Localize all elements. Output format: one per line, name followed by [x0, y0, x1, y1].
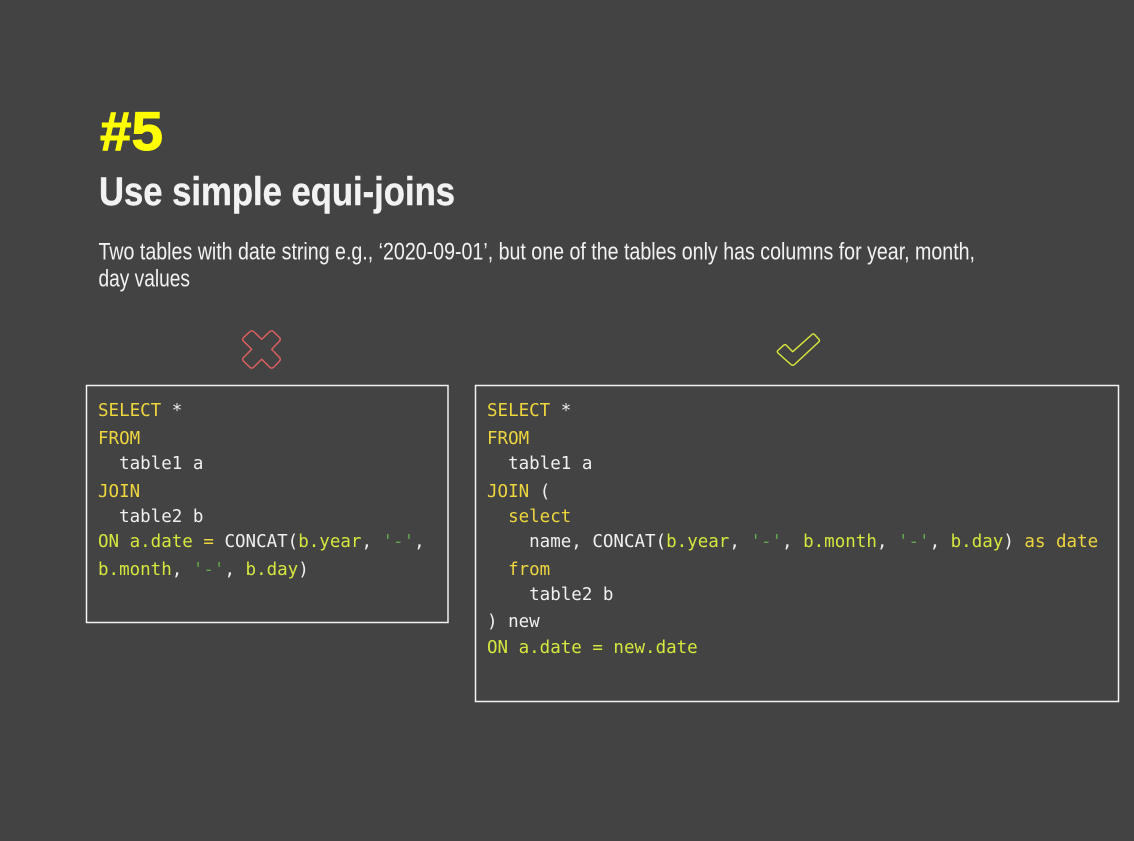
- description text: day values: [98, 266, 190, 292]
- code box outline: [86, 386, 448, 622]
- code: non-equi join: table2 b: [98, 507, 203, 527]
- heading: Use simple equi-joins: [99, 170, 455, 214]
- code: non-equi join: [98, 401, 425, 580]
- code: simple equi-join: table1 a: [487, 454, 592, 474]
- code: non-equi join: SELECT *: [98, 401, 182, 421]
- code: non-equi join: table1 a: [98, 454, 203, 474]
- code: simple equi-join: table2 b: [487, 585, 613, 605]
- panel: good query: [476, 386, 1118, 702]
- code: non-equi join: b.month, '-', b.day): [98, 560, 309, 580]
- tip number: #5: [100, 100, 163, 162]
- code: simple equi-join: name, CONCAT(b.year, '-', b.month, '-', b.day) as date: [487, 532, 1098, 552]
- code: non-equi join: FROM: [98, 429, 140, 449]
- code: non-equi join: JOIN: [98, 482, 140, 502]
- code: simple equi-join: ON a.date = new.date: [487, 638, 698, 658]
- code: simple equi-join: from: [487, 560, 550, 580]
- panel: bad query: [86, 386, 448, 622]
- code: non-equi join: ON a.date = CONCAT(b.year, '-',: [98, 532, 425, 552]
- code: simple equi-join: ) new: [487, 612, 540, 632]
- code: simple equi-join: JOIN (: [487, 482, 550, 502]
- code box outline: [476, 386, 1118, 702]
- code: simple equi-join: select: [487, 507, 571, 527]
- code: simple equi-join: [487, 401, 1098, 658]
- icon: green check mark: [777, 334, 819, 365]
- icon: red cross: [243, 331, 280, 368]
- description text: [98, 238, 975, 292]
- code: simple equi-join: SELECT *: [487, 401, 571, 421]
- code: simple equi-join: FROM: [487, 429, 529, 449]
